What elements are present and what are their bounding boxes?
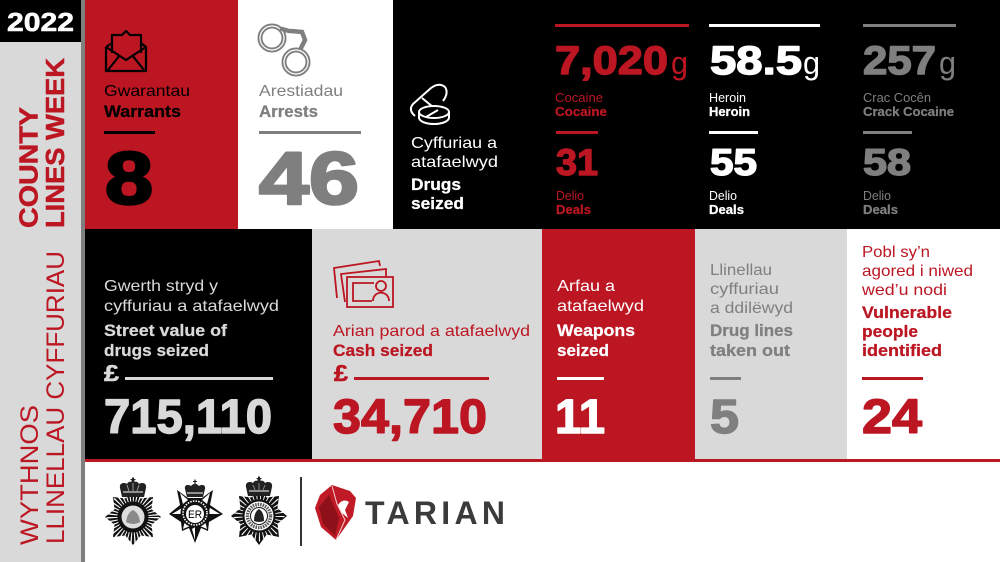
label: Gwerth stryd [104,278,279,315]
label: Drugs seized [411,176,464,213]
label: Arfau a atafaelwyd: atafaelwyd [557,298,644,315]
year badge: 2022 [7,7,74,37]
number: 11: 11 [555,391,605,444]
label: Gwarantau: Gwarantau [104,83,190,100]
panel: drug lines [695,229,847,459]
stat column: cocaine: Cocaine [555,105,607,119]
label: Vulnerable people identified [862,304,952,360]
label: Drugs seized: Drugs [411,176,461,194]
stat column: heroin: 58.5 [710,39,802,83]
label: Vulnerable people identified: Vulnerable [862,304,952,322]
badge: Gwent Police [169,480,223,543]
stat column: cocaine: 7,020 [555,39,668,83]
stat column: heroin [709,24,820,217]
label: Llinellau cyffuriau a ddilëwyd: a ddilëwyd [710,300,793,317]
stat column: crack cocaine: Deals [863,203,898,217]
panel: warrants [85,0,238,229]
label: Llinellau cyffuriau a ddilëwyd: Llinellau [710,262,772,279]
pound sign: £ [334,360,348,386]
label: Arfau a atafaelwyd: Arfau a [557,278,615,295]
label: Vulnerable people identified: people [862,323,918,341]
stat column: crack cocaine: 257 [863,39,936,83]
label: Cyffuriau a atafaelwyd: Cyffuriau a [411,135,497,152]
logo: Tarian wordmark: TARIAN [365,495,505,531]
label: Street value [104,322,228,360]
label: Street value: drugs seized [104,342,209,360]
label: Pobl sy'n agored i niwed wed'u nodi: agored i niwed [862,263,973,280]
sidebar title: Welsh [16,251,70,545]
stat column: cocaine: 31 [556,142,598,183]
pound sign: £ [104,360,119,386]
label: Pobl sy'n agored i niwed wed'u nodi: Pobl sy’n [862,244,930,261]
panel: sidebar [0,0,85,562]
label: Drug lines taken out: taken out [710,342,791,360]
badge: Gwent Police: ER [188,509,202,521]
label: Drug lines taken out [710,322,793,360]
number: 715,110: 715,110 [104,391,272,444]
badge: Dyfed-Powys Police [105,478,161,545]
stat column: cocaine: Cocaine [555,91,603,105]
icon: pills [411,85,449,124]
stat column: heroin: Delio [709,189,737,203]
sidebar title: English: LINES WEEK [40,58,70,228]
stat column: crack cocaine: 58 [863,142,911,183]
stat column: crack cocaine: Delio [863,189,891,203]
panel: street value [85,229,312,459]
stat column: crack cocaine: Crack Cocaine [863,105,954,119]
icon: envelope [106,31,146,71]
panel: arrests [238,0,393,229]
badge: South Wales Police [231,476,287,545]
panel: drugs seized [393,0,1000,229]
year badge [0,0,81,42]
label: Drugs seized: seized [411,195,464,213]
label: Gwerth stryd: Gwerth stryd y [104,278,218,295]
panel: logos footer [105,476,505,546]
stat column: cocaine: Delio [556,189,584,203]
stat column: cocaine: g [671,45,688,81]
label: Llinellau cyffuriau a ddilëwyd [710,262,793,317]
panel: cash [312,229,542,459]
label: Llinellau cyffuriau a ddilëwyd: cyffuriau [710,281,779,298]
stat column: heroin: g [803,45,820,81]
panel: weapons [542,229,695,459]
label: Weapons seized [557,322,635,360]
number: 24: 24 [862,391,922,444]
stat column: crack cocaine: g [939,45,956,81]
label: Pobl sy'n agored i niwed wed'u nodi: wed’u nodi [861,282,947,299]
label: Arfau a atafaelwyd [557,278,644,315]
label: Arrests: Arrests [259,103,318,121]
icon: handcuffs [260,26,308,74]
logo: Tarian shield [315,485,356,540]
number: 34,710: 34,710 [333,391,487,444]
label: Arian parod: Arian parod a atafaelwyd [333,323,530,340]
number: 8: 8 [105,137,153,220]
stat column: crack cocaine: Crac Cocên [863,91,931,105]
stat column: heroin: Deals [709,203,744,217]
label: Gwerth stryd: cyffuriau a atafaelwyd [104,298,279,315]
label: Cyffuriau a atafaelwyd: atafaelwyd [411,154,498,171]
stat column: heroin: Heroin [709,91,746,105]
stat column: cocaine: Deals [556,203,591,217]
number: 46: 46 [259,137,359,220]
sidebar title: English: COUNTY [14,107,44,228]
sidebar title: Welsh: WYTHNOS [16,405,44,545]
label: Arestiadau: Arestiadau [259,83,343,100]
label: Vulnerable people identified: identified [862,342,942,360]
panel: vulnerable people [847,229,1000,459]
number: 5: 5 [710,391,739,444]
sidebar title: English [14,58,70,228]
label: Weapons seized: Weapons [557,322,635,340]
label: Cyffuriau a atafaelwyd [411,135,498,171]
icon: banknotes [334,261,393,307]
label: Pobl sy'n agored i niwed wed'u nodi [861,244,973,299]
stat column: heroin: Heroin [709,105,750,119]
stat column: crack cocaine [863,24,956,217]
label: Drug lines taken out: Drug lines [710,322,793,340]
sidebar title: Welsh: LLINELLAU CYFFURIAU [42,251,70,544]
label: Cash seized: Cash seized [333,342,433,360]
label: Street value: Street value of [104,322,228,340]
stat column: heroin: 55 [710,142,757,183]
label: Weapons seized: seized [557,342,609,360]
label: Warrants: Warrants [104,103,181,121]
stat column: cocaine [555,24,689,217]
